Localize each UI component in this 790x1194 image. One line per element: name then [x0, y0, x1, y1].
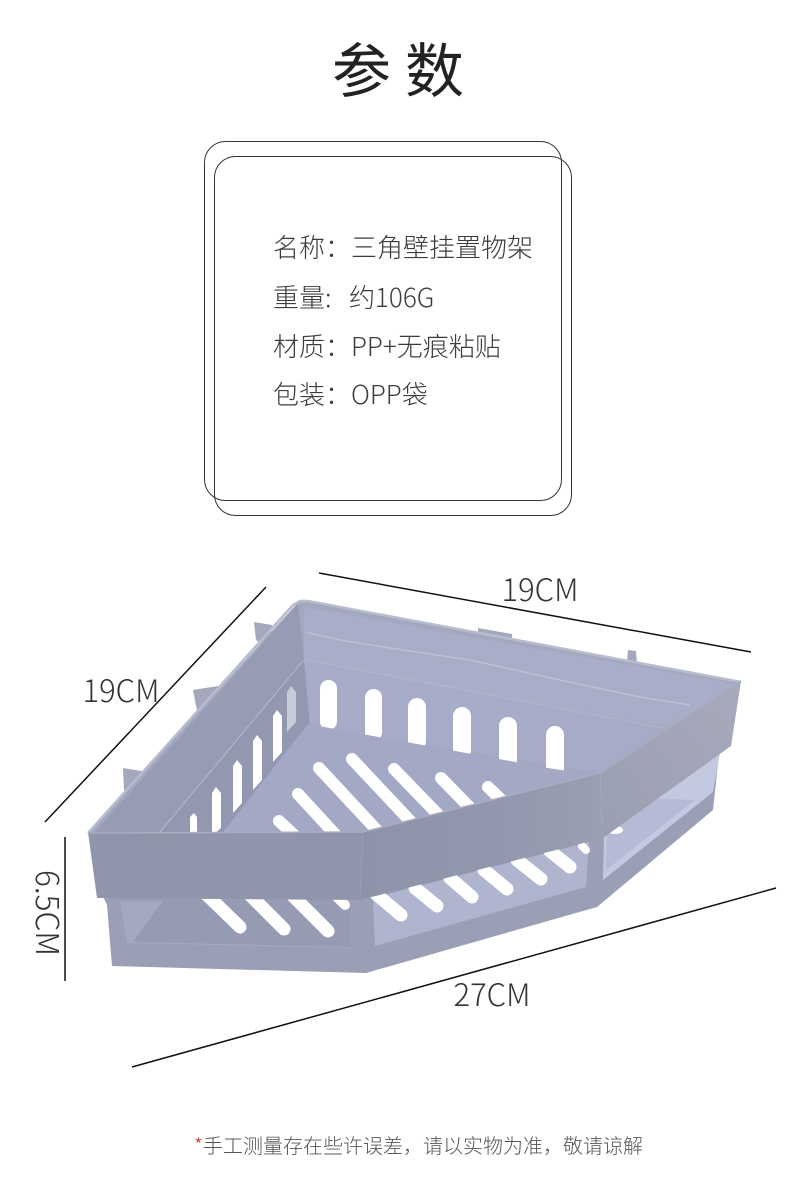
card outline back: [204, 142, 562, 500]
rim top edge: [88, 601, 741, 833]
panel: parameters card: [204, 142, 572, 516]
dimension: top left 19CM: [45, 587, 266, 822]
footnote: 手工测量存在些许误差，请以实物为准，敬请谅解: [203, 1130, 643, 1159]
front band right segment: [600, 681, 741, 838]
shelf inner body: [88, 600, 741, 833]
dimension: top left 19CM: 19CM: [82, 666, 160, 711]
spec: weight: 约106G: [349, 278, 434, 315]
dimension: height 6.5CM: 6.5CM: [26, 870, 72, 956]
lower mid window: [373, 842, 589, 946]
lower left window: [120, 901, 350, 948]
footnote: *: [194, 1130, 203, 1159]
spec: packaging: 包装：OPP袋: [273, 375, 428, 412]
left back wall: [160, 660, 310, 835]
band highlight: [88, 681, 741, 833]
right window floor: [606, 798, 695, 870]
front band left segment: [88, 832, 363, 900]
right lower window: [603, 753, 720, 880]
card outline front: [214, 156, 572, 516]
left wall slots: [190, 686, 296, 836]
back wall slots: [320, 680, 564, 778]
floor slots: [273, 753, 506, 832]
right back wall: [304, 660, 664, 773]
product: triangular corner shelf: [88, 600, 741, 973]
dimension: bottom 27CM: [132, 888, 776, 1067]
spec: name: 名称：三角壁挂置物架: [273, 228, 533, 265]
dimension: bottom 27CM: 27CM: [453, 970, 531, 1015]
rim seam: [305, 632, 690, 705]
inner wall line: [160, 660, 664, 832]
mounting lugs: [123, 622, 637, 798]
front band middle segment: [360, 773, 603, 900]
lower body under the band: [100, 745, 720, 973]
dimension: top right 19CM: 19CM: [501, 565, 579, 610]
window shadow floor: [133, 900, 350, 947]
floor plate: [220, 724, 600, 836]
title: 参数: [332, 24, 478, 109]
lower left slots: [207, 895, 345, 931]
spec: material: 材质：PP+无痕粘贴: [273, 327, 501, 364]
spec: weight: 重量:: [273, 278, 332, 315]
lower mid slots: [376, 846, 586, 915]
left upper wall: [95, 604, 304, 833]
right window slot: [607, 826, 623, 834]
dimension: top right 19CM: [319, 565, 751, 652]
right upper wall: [304, 607, 735, 727]
